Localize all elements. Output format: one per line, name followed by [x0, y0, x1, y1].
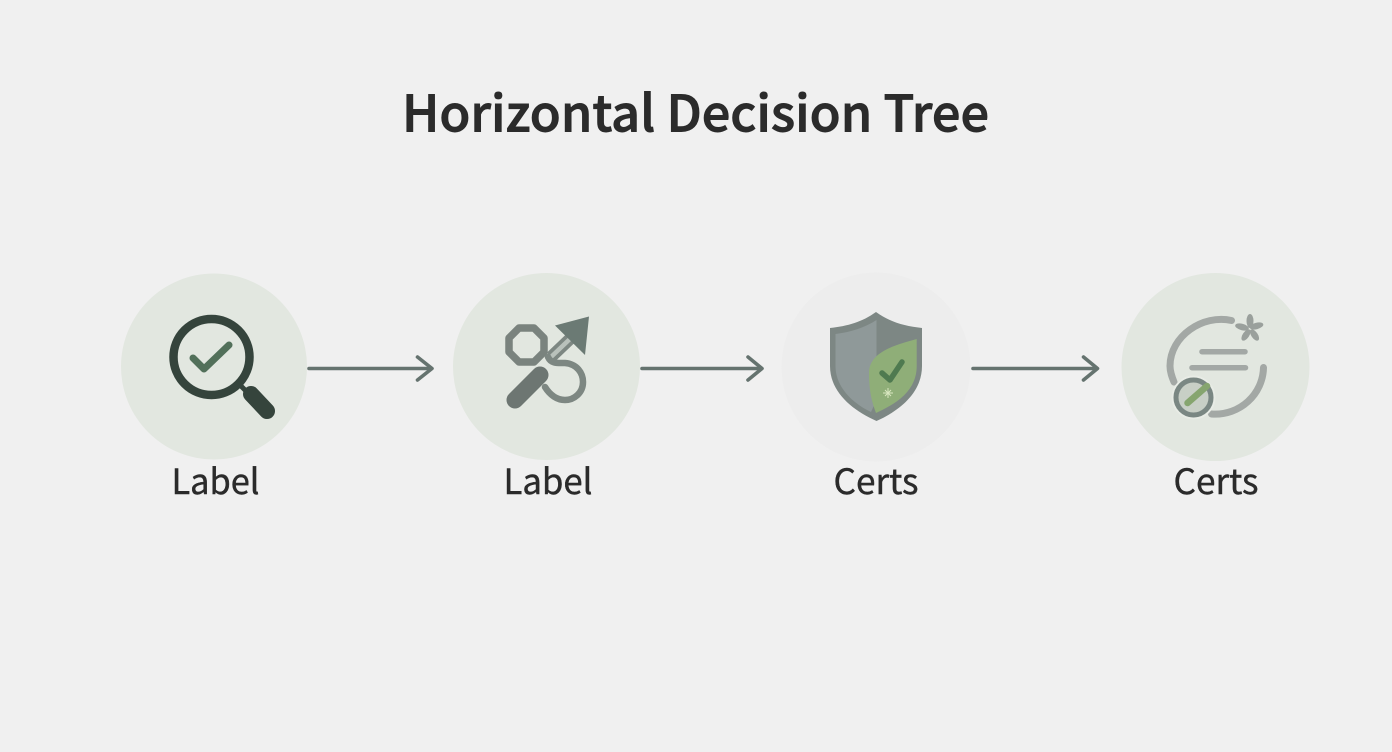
- node 4 circle: [1122, 273, 1310, 461]
- node 3 circle: [782, 272, 970, 462]
- node 3 label: Certs: [834, 454, 918, 505]
- arrow 3: [973, 357, 1098, 380]
- node 2 label: Label: [504, 454, 592, 505]
- node 1 circle: [121, 274, 307, 460]
- node 1 label: Label: [172, 454, 260, 505]
- asterisk: [1234, 314, 1264, 342]
- node 4 label: Certs: [1174, 454, 1258, 505]
- arrow 1: [309, 357, 432, 380]
- node 1: search: [121, 274, 307, 505]
- node 2: tools: [453, 273, 640, 505]
- icon: tools and arrow: [509, 316, 589, 400]
- arrow 2: [642, 357, 762, 380]
- title: Horizontal Decision Tree: [402, 74, 989, 146]
- icon: magnifying glass with check: [174, 319, 267, 411]
- icon: certificate badge: [1170, 314, 1264, 418]
- node 3: certification shield: [782, 272, 970, 505]
- node 4: certificate: [1122, 273, 1310, 505]
- node 2 circle: [453, 273, 640, 460]
- icon: shield with leaf and check: [830, 312, 922, 421]
